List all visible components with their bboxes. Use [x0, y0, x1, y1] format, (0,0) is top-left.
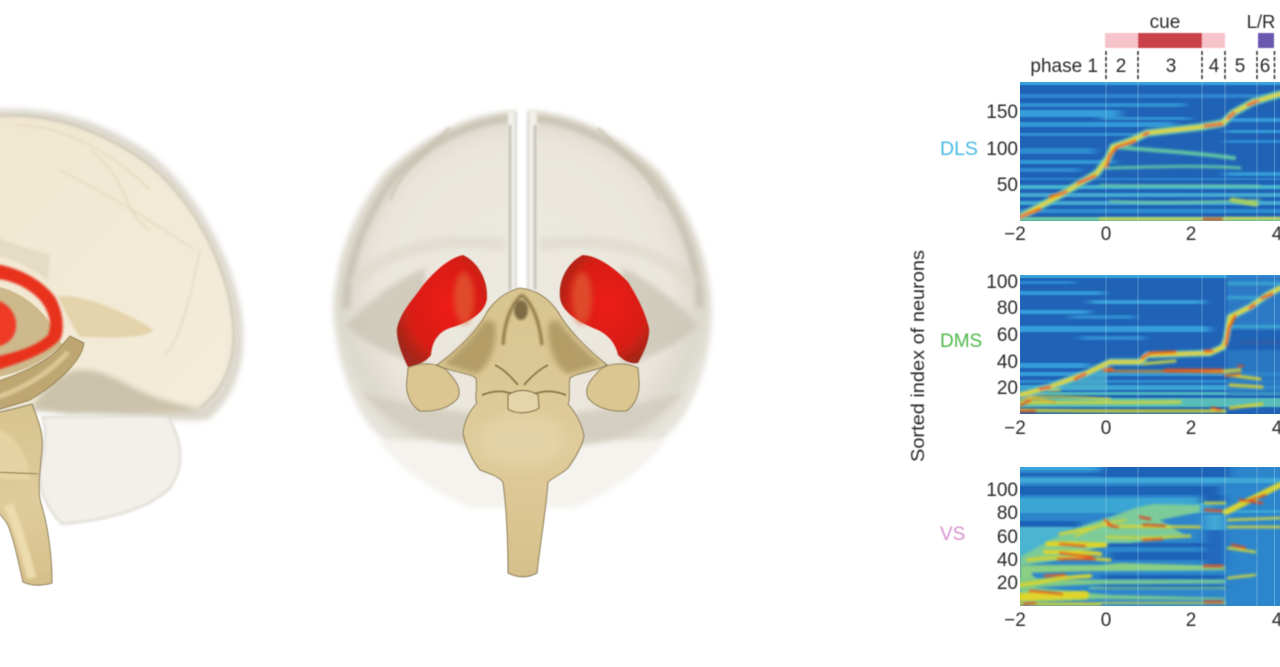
fan wedge [1020, 369, 1108, 392]
VS x ticks [1004, 610, 1280, 631]
phase header [1030, 11, 1275, 81]
DMS y ticks: 60 [997, 325, 1018, 346]
DLS y ticks: 50 [997, 175, 1018, 196]
red striatum, right [560, 255, 649, 363]
L/R bar [1258, 33, 1274, 48]
pons bump [508, 390, 539, 413]
cue bar [1105, 33, 1225, 48]
DMS y ticks: 100 [986, 272, 1018, 293]
DLS y ticks: 100 [986, 139, 1018, 160]
DLS y ticks: 150 [986, 102, 1018, 123]
DLS heatmap [1005, 81, 1280, 221]
DLS x ticks [1004, 224, 1280, 245]
phase labels: 5 [1235, 56, 1245, 77]
phase labels: 2 [1116, 56, 1126, 77]
heatmap panel: DMS [940, 272, 1280, 439]
pale thalamus overlay [58, 296, 154, 337]
red striatum, lateral [0, 263, 63, 372]
brainstem, front [437, 288, 607, 577]
DMS label: DMS [940, 331, 982, 352]
translucent cerebrum, lateral [0, 109, 243, 421]
DLS x ticks: 0 [1101, 224, 1111, 245]
temporal lobe shadow [32, 370, 202, 414]
medulla shading [521, 482, 523, 565]
VS x ticks: 0 [1101, 610, 1111, 631]
heatmap panel: VS [940, 462, 1280, 631]
phase labels [1030, 56, 1270, 77]
y axis title: Sorted index of neurons [908, 250, 928, 462]
DMS x ticks: 2 [1186, 418, 1196, 439]
DMS x ticks: 0 [1101, 418, 1111, 439]
VS y ticks [986, 480, 1018, 594]
cerebellum, translucent [40, 416, 180, 524]
VS x ticks: 2 [1186, 610, 1196, 631]
brainstem surface detail [443, 295, 602, 466]
VS y ticks: 60 [997, 527, 1018, 548]
tan inner structure [0, 285, 62, 378]
L/R label: L/R [1247, 11, 1275, 32]
frontal brain view [333, 100, 712, 577]
heatmap panel: DLS [940, 81, 1280, 245]
VS y ticks: 80 [997, 503, 1018, 524]
DLS x ticks: −2 [1004, 224, 1026, 245]
VS y ticks: 20 [997, 573, 1018, 594]
DMS y ticks: 40 [997, 352, 1018, 373]
phase labels: 6 [1260, 56, 1270, 77]
fan wedge, yellow-green [1020, 504, 1200, 566]
DLS label: DLS [940, 138, 978, 160]
VS y ticks: 100 [986, 480, 1018, 501]
phase labels: phase 1 [1030, 56, 1098, 77]
VS label: VS [940, 524, 965, 545]
DMS heatmap [1005, 274, 1280, 414]
lateral brain view [0, 109, 243, 585]
midbrain ring, lateral [0, 336, 84, 412]
phase labels: 3 [1166, 56, 1176, 77]
DMS y ticks: 80 [997, 298, 1018, 319]
DMS x ticks: −2 [1004, 418, 1026, 439]
right amygdala lobe [587, 364, 639, 411]
brainstem, lateral [0, 404, 52, 585]
DLS x ticks: 2 [1186, 224, 1196, 245]
translucent cerebrum, front [333, 111, 712, 508]
DLS y ticks [986, 102, 1018, 196]
VS y ticks: 40 [997, 550, 1018, 571]
phase labels: 4 [1209, 56, 1220, 77]
DMS y ticks [986, 272, 1018, 399]
left amygdala lobe [407, 364, 459, 411]
red striatum, left [397, 255, 487, 367]
DMS y ticks: 20 [997, 378, 1018, 399]
VS x ticks: −2 [1004, 610, 1026, 631]
right side block [1227, 275, 1280, 395]
central fissure gap [508, 100, 537, 292]
cue label: cue [1150, 12, 1180, 33]
VS heatmap [1005, 462, 1280, 606]
DMS x ticks [1004, 418, 1280, 439]
